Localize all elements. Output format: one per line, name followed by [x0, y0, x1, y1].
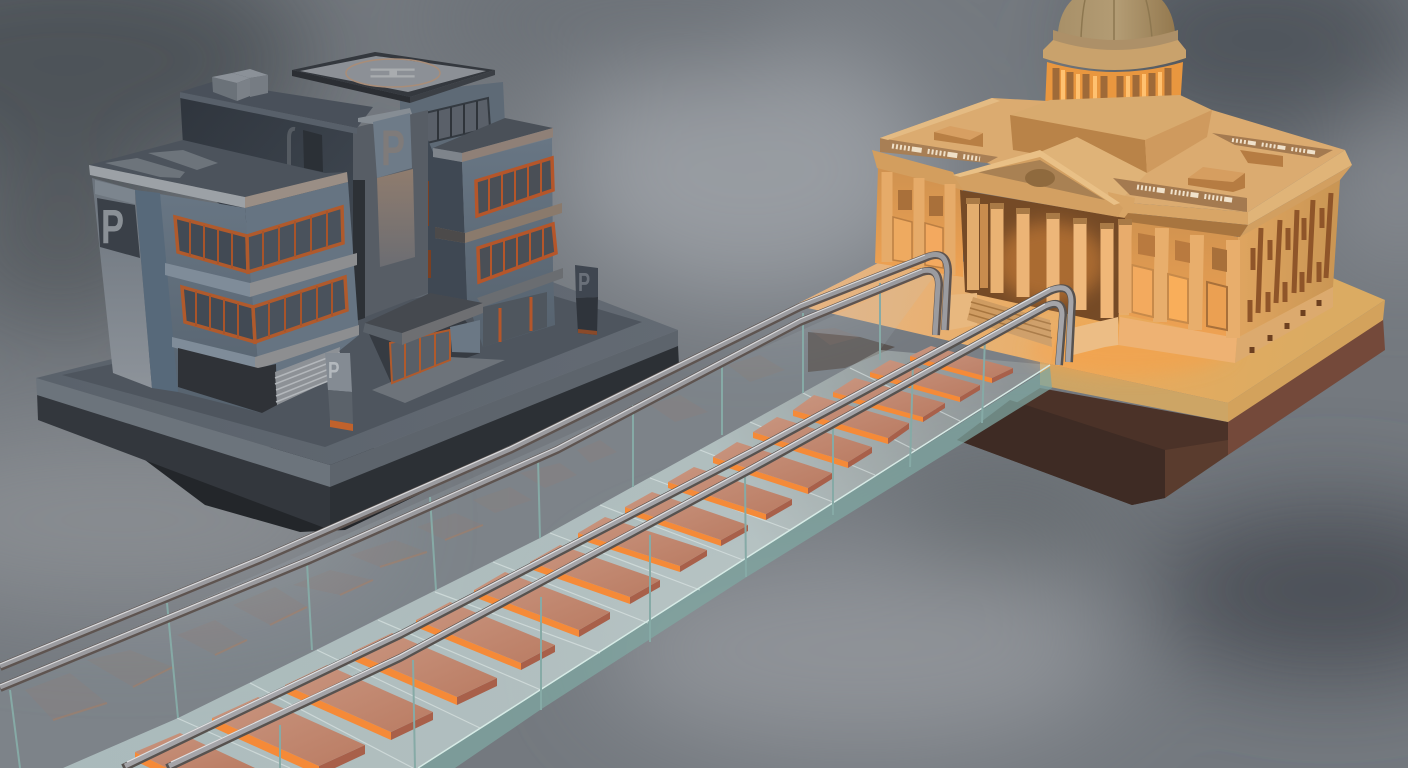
- left wing facade: [872, 150, 963, 277]
- wall pipe and door: [289, 129, 323, 172]
- reflections of tiles in left panel: [25, 328, 860, 720]
- signpost right: P: [578, 268, 590, 297]
- drum with glowing columns: [1042, 30, 1186, 128]
- garage shutter: [275, 347, 340, 405]
- deck panel seams: [177, 368, 960, 768]
- helipad with H marking: H: [357, 68, 428, 78]
- copper tiles: [135, 346, 1013, 768]
- deck outer edge highlight: [418, 365, 1050, 768]
- ground floor dark wall: [178, 348, 277, 413]
- roof equipment: [105, 150, 218, 178]
- facade B recesses and windows: [1250, 193, 1331, 353]
- left roof balustrade: [880, 98, 1000, 163]
- left glass railing panel: [0, 268, 940, 768]
- tower P sign panel: [358, 108, 415, 267]
- main left wing: [89, 140, 359, 413]
- corner column with P sign: P: [101, 199, 124, 253]
- portico roof: [1040, 137, 1147, 203]
- left platform: floating base block: [145, 440, 470, 532]
- main roof: [880, 98, 1345, 212]
- dark view through far deck: [808, 332, 895, 372]
- walkway: [372, 357, 505, 403]
- right wing ground floor: [483, 292, 547, 347]
- helipad with H marking: [292, 52, 495, 103]
- left building on floating platform: [36, 52, 679, 532]
- portico recess: [960, 190, 1125, 325]
- right platform: faces and top: [795, 260, 1385, 422]
- deck edge thickness: [418, 367, 1052, 768]
- column capitals: [966, 201, 1132, 226]
- right handrails: [123, 288, 1072, 768]
- right platform: brown underside: [957, 318, 1385, 505]
- corner column with P sign: [92, 178, 178, 392]
- roof boxes: [934, 126, 1283, 192]
- glass bridge: [0, 255, 1072, 768]
- right facade B base: [1235, 287, 1333, 363]
- canopy: [363, 293, 483, 345]
- upper ledge: [165, 253, 357, 297]
- right glass railing panel: [167, 305, 1063, 768]
- signpost front: P: [328, 359, 340, 384]
- right wing lower windows: [478, 224, 556, 282]
- right wing narrow side windows: [427, 181, 429, 278]
- right wing: [427, 118, 563, 347]
- portico steps and plinths: [948, 293, 1118, 355]
- entrance windows: [390, 330, 450, 383]
- upper window band: [175, 207, 343, 272]
- left platform: dark lower faces: [37, 345, 679, 530]
- central lower block and canopy: [363, 293, 505, 403]
- back tower windows: [425, 98, 490, 143]
- facade A pilasters and windows: [1122, 222, 1233, 338]
- glass railing posts: [10, 283, 985, 768]
- dome: [1058, 0, 1175, 42]
- left wing roof: [89, 140, 347, 197]
- left platform: rim faces: [36, 330, 678, 487]
- right wing middle band: [435, 203, 562, 243]
- rooftop air-conditioning units: [212, 69, 268, 101]
- right government building on floating platform: [795, 0, 1385, 505]
- right wing upper windows: [476, 158, 553, 216]
- right facade base: [1118, 317, 1237, 363]
- roof central pedestal: [1010, 95, 1212, 173]
- pier: [450, 320, 480, 353]
- back tower upper level: [400, 82, 505, 175]
- left handrails: [0, 255, 948, 688]
- signpost front: [325, 353, 353, 431]
- right facade B: [1237, 180, 1340, 338]
- pediment: [953, 150, 1123, 217]
- lower window band: [182, 277, 347, 342]
- right wing lower band: [477, 268, 563, 307]
- signpost right: [575, 265, 598, 335]
- right facade A: [1117, 213, 1238, 340]
- right roof balustrades and cornice: [1108, 133, 1352, 237]
- left platform: top surface: [36, 262, 678, 465]
- lower ledge: [172, 325, 359, 370]
- central tower: [180, 69, 428, 322]
- deck glass: [63, 350, 1050, 768]
- portico columns: [973, 202, 1125, 318]
- tower P sign panel: P: [381, 121, 405, 176]
